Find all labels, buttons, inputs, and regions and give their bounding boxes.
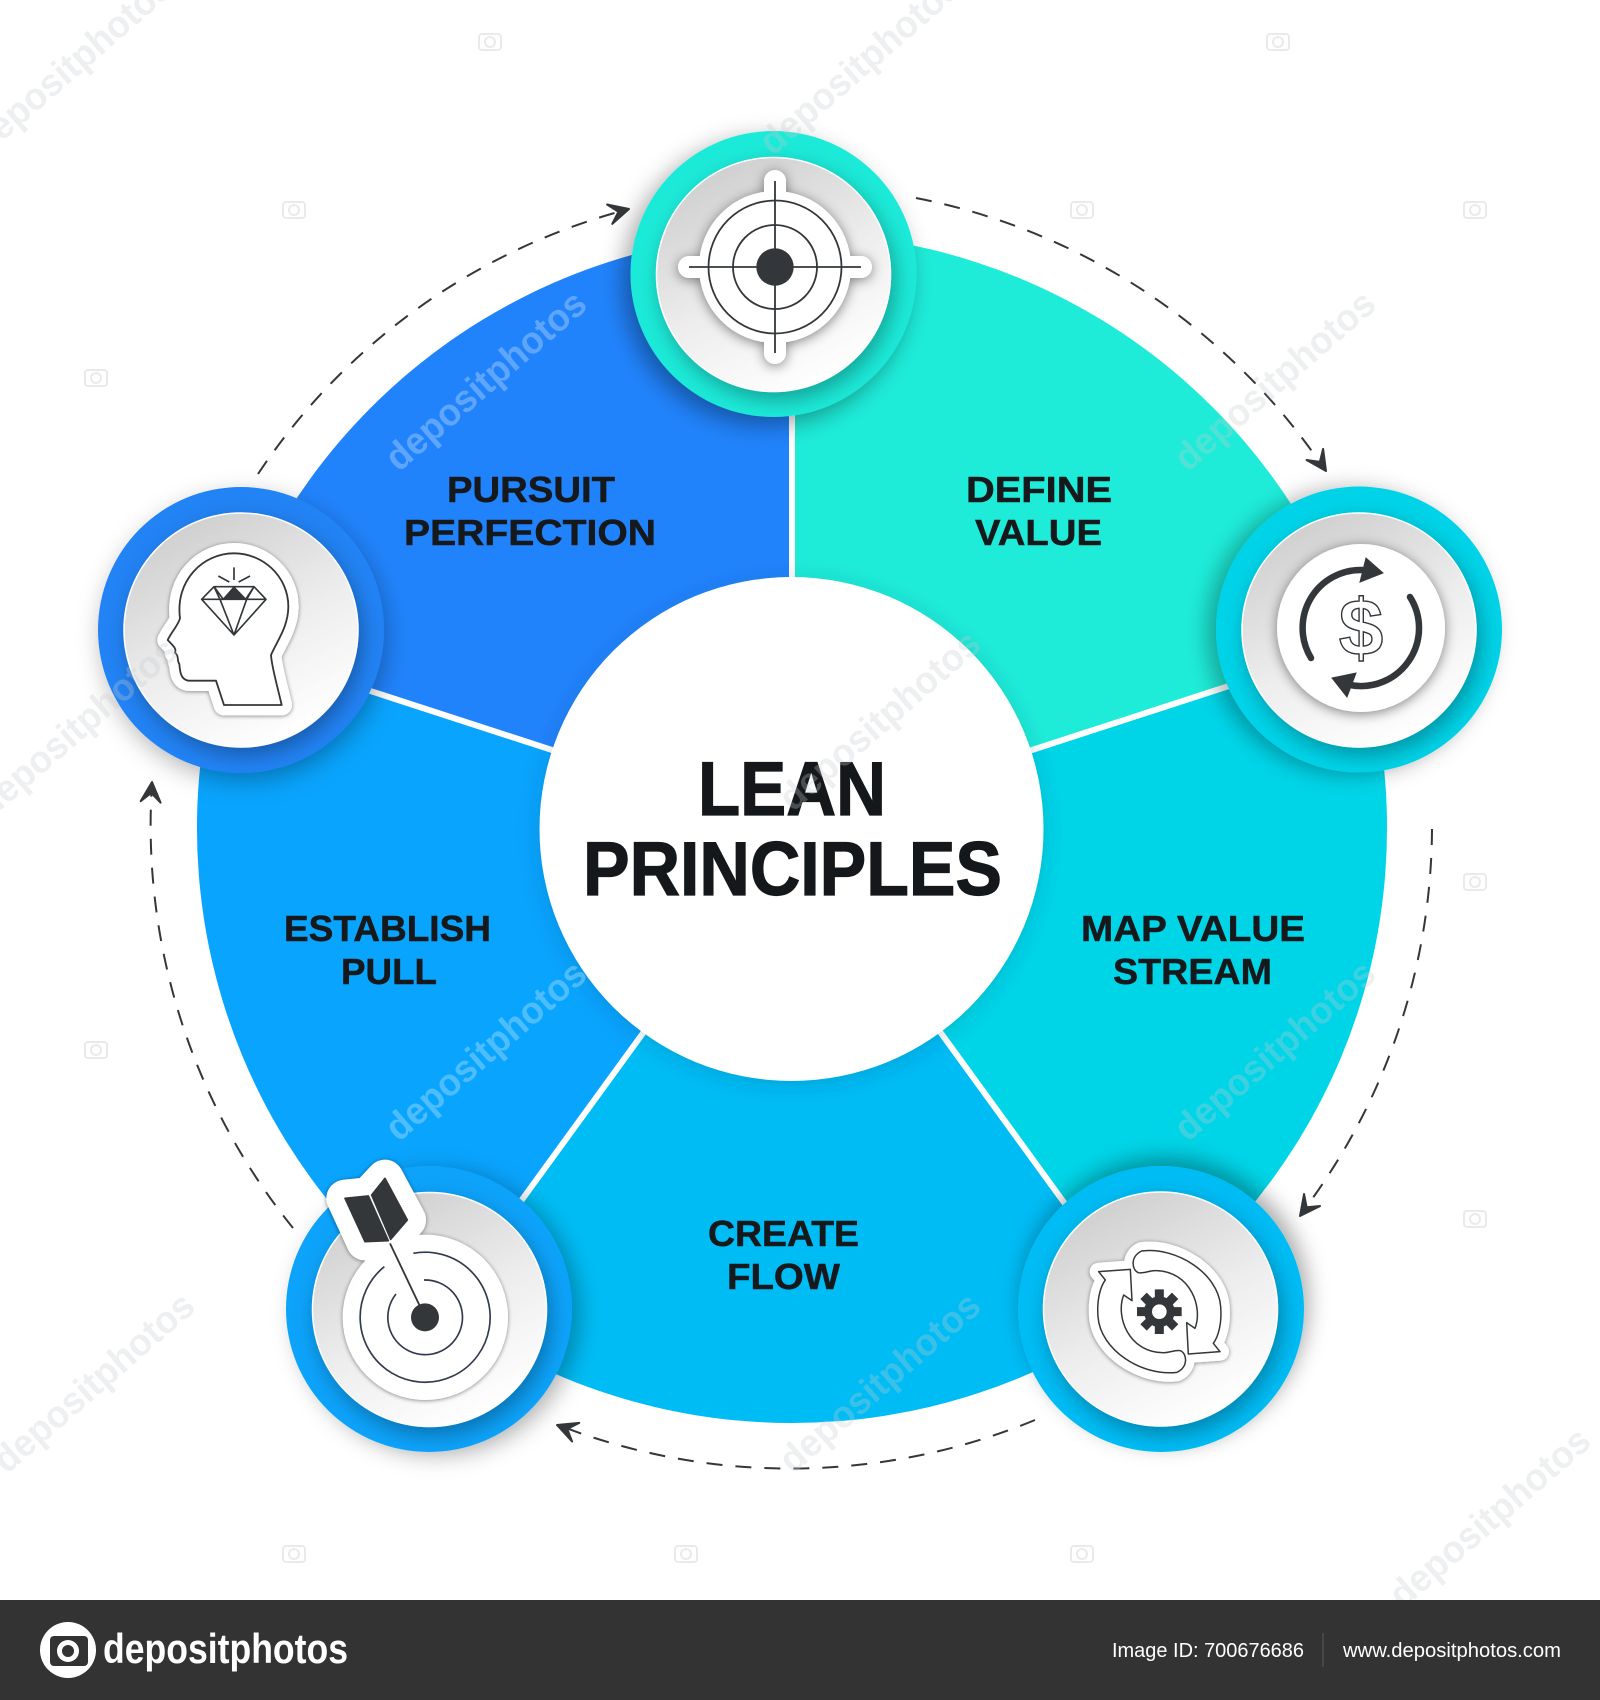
footer logo mark: [40, 1622, 96, 1678]
icon: dollar with cycle arrows: [1303, 558, 1419, 697]
stock watermarks on coloured areas: depositphotos: [377, 952, 595, 1149]
segment: pursuit perfection: [226, 233, 792, 828]
arrow: create flow to establish pull: [141, 781, 293, 1228]
footer website: www.depositphotos.com: [1342, 1640, 1561, 1662]
badge: pursuit perfection (head with diamond): [98, 487, 384, 773]
arrow: establish pull to pursuit perfection: [258, 199, 632, 474]
center circle: [540, 577, 1044, 1081]
arrow: define value to map value stream: [1292, 829, 1432, 1222]
label: establish pull: PULL: [341, 951, 437, 992]
stock watermarks on white and mixed areas: depositphotos: [771, 622, 989, 819]
label: pursuit perfection: PURSUIT: [447, 469, 615, 510]
footer image id: Image ID: 700676686: [1112, 1640, 1304, 1662]
icon: circular arrows with gear: [1098, 1251, 1221, 1373]
wheel segments: [197, 233, 1387, 1423]
stock watermarks on coloured areas: depositphotos: [377, 282, 595, 479]
label: establish pull: [284, 908, 491, 992]
label: define value: [966, 469, 1112, 553]
segment: create flow: [442, 828, 1142, 1423]
icon: gear: [1137, 1289, 1182, 1334]
badge: map value stream (dollar cycle): [1216, 486, 1502, 772]
arrow: target to define value: [916, 198, 1334, 477]
label: define value: VALUE: [975, 512, 1102, 553]
stock watermarks on white and mixed areas: depositphotos: [1166, 952, 1384, 1149]
label: create flow: [708, 1213, 859, 1297]
label: map value stream: MAP VALUE: [1081, 908, 1305, 949]
footer bar: [0, 1600, 1600, 1700]
stock watermarks on white and mixed areas: depositphotos: [771, 1284, 989, 1481]
faint stock camera marks: [85, 34, 1486, 1562]
segment: establish pull: [197, 644, 792, 1309]
stock watermarks on white and mixed areas: depositphotos: [1381, 1419, 1599, 1616]
segment labels: [284, 469, 1305, 1297]
badge: define value (crosshair target): [630, 131, 916, 417]
label: define value: DEFINE: [966, 469, 1112, 510]
label: pursuit perfection: PERFECTION: [404, 512, 656, 553]
dashed cycle arrows: [141, 198, 1432, 1469]
arrow: map value stream to create flow: [553, 1416, 1035, 1469]
title line: PRINCIPLES: PRINCIPLES: [583, 827, 1002, 912]
stock watermarks on coloured areas: [377, 282, 595, 1149]
label: pursuit perfection: [404, 469, 656, 553]
icon: crosshair target: [689, 181, 861, 353]
badge: establish pull (dart in target): [286, 1166, 572, 1452]
segment: map value stream: [792, 644, 1387, 1309]
icon: dollar with cycle arrows: $: [1339, 583, 1383, 672]
icon: head with diamond: [168, 553, 288, 705]
label: create flow: CREATE: [708, 1213, 859, 1254]
footer logo wordmark: depositphotos: [103, 1625, 348, 1672]
segment: define value: [792, 233, 1358, 828]
label: create flow: FLOW: [727, 1256, 840, 1297]
stock watermarks on white and mixed areas: depositphotos: [1166, 282, 1384, 479]
segment divider lines: [226, 233, 1358, 1309]
label: map value stream: [1081, 908, 1305, 992]
label: establish pull: ESTABLISH: [284, 908, 491, 949]
label: map value stream: STREAM: [1113, 951, 1272, 992]
title line: LEAN: LEAN: [698, 747, 886, 832]
badge: create flow (circular gear arrows): [1018, 1166, 1304, 1452]
title: [583, 747, 1002, 912]
icon: dart and target: [343, 1178, 508, 1400]
